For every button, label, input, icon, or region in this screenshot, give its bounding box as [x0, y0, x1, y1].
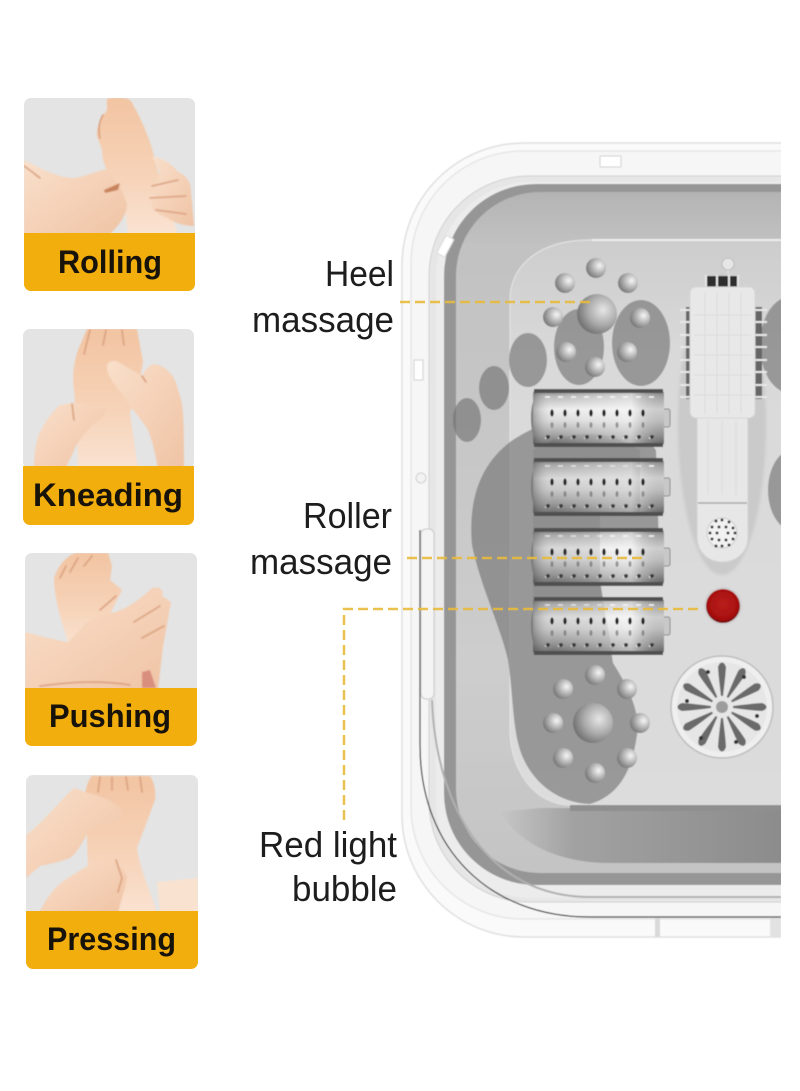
- rim slot: [421, 529, 434, 699]
- panel: foot spa basin: [402, 120, 800, 960]
- photo: pressing hands on foot: [26, 776, 198, 915]
- label bar: Rolling: [24, 233, 195, 291]
- label: Heel massage: [252, 253, 394, 340]
- speaker dots: [707, 518, 737, 548]
- label: Roller massage: massage: [250, 541, 392, 582]
- toe: [509, 333, 547, 387]
- card: Rolling: [24, 98, 195, 291]
- basin wall: [456, 192, 800, 873]
- module knob: [722, 258, 734, 270]
- label: Roller massage: Roller: [303, 495, 392, 536]
- label: Heel massage: Heel: [325, 253, 394, 294]
- toe: [453, 398, 481, 442]
- callout: heel massage line: [400, 301, 592, 303]
- photo: rolling hands on foot: [24, 98, 194, 236]
- label: Roller massage: [250, 495, 392, 582]
- card: Kneading: [23, 329, 194, 525]
- photo: kneading hands on foot: [34, 329, 184, 470]
- panel: massage technique cards: [23, 98, 198, 969]
- toe: [479, 366, 509, 410]
- foot silhouette: right foot: [760, 297, 800, 532]
- label: Kneading: Kneading: [33, 477, 183, 513]
- callout: red light bubble line: [344, 609, 698, 822]
- rim line: [420, 530, 781, 917]
- heel massage nodes: [543, 258, 650, 377]
- module neck: [697, 415, 748, 562]
- label: Pushing: Pushing: [49, 698, 171, 734]
- label: Heel massage: massage: [252, 299, 394, 340]
- toe: [612, 300, 670, 386]
- card: Pressing: [26, 775, 198, 969]
- label: Red light bubble: Red light: [259, 824, 397, 865]
- red light: [704, 587, 742, 625]
- rim tabs: [414, 156, 781, 937]
- label bar: Pushing: [25, 688, 197, 746]
- centre massage module: [678, 258, 767, 575]
- label bar: Kneading: [23, 466, 194, 525]
- outer rim: [402, 143, 800, 937]
- label: Red light bubble: bubble: [292, 868, 397, 909]
- roller 1: [531, 389, 670, 447]
- module head: [690, 287, 755, 418]
- label bar: Pressing: [26, 911, 198, 969]
- toe: [554, 309, 604, 385]
- foot sole: [471, 418, 660, 804]
- photo: pushing hands on foot: [25, 553, 171, 690]
- inner rim: [429, 176, 800, 902]
- roller 3: [531, 528, 670, 586]
- label: Red light bubble: [259, 824, 397, 909]
- roller 2: [531, 458, 670, 516]
- foot silhouette: left foot: [453, 300, 670, 804]
- right-edge cut mask: [781, 120, 800, 960]
- callout: roller massage line: [407, 557, 645, 559]
- bubble fan: [671, 656, 773, 758]
- platform floor: [510, 240, 790, 805]
- lower massage nodes: [543, 665, 650, 783]
- basin bottom wall band: [500, 808, 790, 863]
- card: Pushing: [25, 553, 197, 746]
- label: Rolling: Rolling: [58, 244, 162, 280]
- dark channel: [444, 184, 800, 885]
- foot shadow over rollers: [533, 434, 640, 655]
- label: Pressing: Pressing: [47, 921, 176, 957]
- module teeth: [686, 307, 762, 399]
- roller 4: [531, 597, 670, 655]
